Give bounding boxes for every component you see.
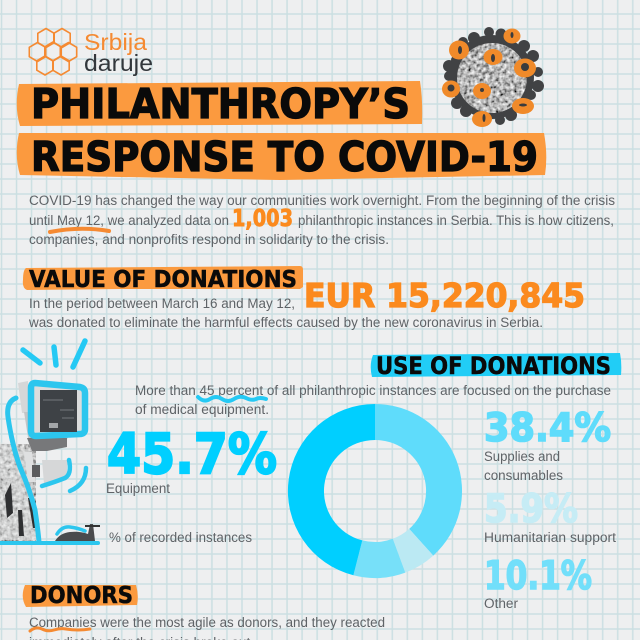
title line 2: RESPONSE TO COVID-19 — [31, 133, 538, 181]
use description: More than 45 percent of all philanthropic instances are focused on the purchase — [135, 383, 611, 398]
underline: May 12 — [50, 229, 109, 232]
device wheel — [55, 524, 100, 541]
highlighted number: 1,003: 1,003 — [232, 206, 293, 232]
use description — [135, 383, 611, 417]
value description: was donated to eliminate the harmful effects caused by the new coronavirus in Serbia. — [28, 315, 543, 330]
use description: of medical equipment. — [135, 402, 269, 417]
heading: value of donations: VALUE OF DONATIONS — [29, 267, 297, 293]
stat: equipment: 45.7% — [107, 422, 277, 486]
intro paragraph — [29, 193, 615, 247]
section: value of donations — [23, 266, 585, 330]
total amount: EUR 15,220,845 — [304, 276, 585, 315]
squiggle underline — [198, 397, 266, 401]
logo word: daruje: daruje — [84, 50, 153, 76]
section: use of donations — [106, 352, 621, 611]
donors description: Companies were the most agile as donors, and they reacted — [29, 615, 385, 630]
squiggle underline: companies — [30, 628, 90, 631]
stat: humanitarian support — [484, 487, 616, 545]
donut chart — [288, 404, 462, 578]
virus surface texture — [457, 43, 527, 113]
logo word: Srbija: Srbija — [84, 29, 148, 55]
stat: other: Other — [484, 596, 519, 611]
icon: hexagon cluster — [29, 28, 77, 75]
stat: humanitarian support: Humanitarian support — [484, 530, 616, 545]
stat: other — [484, 554, 592, 611]
stat: humanitarian support: 5.9% — [484, 487, 578, 532]
intro paragraph: until May 12, we analyzed data on — [29, 213, 229, 228]
stat: supplies and consumables: consumables — [484, 468, 563, 483]
heading: donors: DONORS — [30, 583, 133, 609]
title line 1: PHILANTHROPY’S — [31, 80, 410, 128]
stat: other: 10.1% — [484, 554, 592, 599]
stat: supplies and consumables: Supplies and — [484, 449, 560, 464]
logo: Srbija daruje — [29, 28, 153, 76]
icon: coronavirus — [442, 27, 544, 127]
title banner — [17, 80, 546, 181]
value description — [28, 296, 543, 330]
heading: use of donations: USE OF DONATIONS — [376, 352, 611, 380]
monitor frame — [31, 383, 85, 436]
donors description — [29, 615, 385, 640]
intro paragraph: COVID-19 has changed the way our communities work overnight. From the beginning of the crisis — [29, 193, 615, 208]
legend note: % of recorded instances — [109, 530, 252, 545]
monitor screen — [40, 390, 77, 432]
device body — [0, 381, 68, 542]
intro paragraph: philanthropic instances in Serbia. This is how citizens, — [298, 213, 614, 228]
section: donors — [23, 583, 385, 640]
illustration: medical monitor — [0, 341, 100, 543]
stat: equipment: Equipment — [106, 481, 170, 496]
cyan outline strokes — [0, 398, 98, 543]
stat: supplies and consumables — [484, 406, 611, 483]
motion rays — [23, 341, 85, 367]
value description: In the period between March 16 and May 12, — [29, 296, 295, 311]
intro paragraph: companies, and nonprofits respond in solidarity to the crisis. — [29, 232, 389, 247]
stat: supplies and consumables: 38.4% — [484, 406, 611, 451]
